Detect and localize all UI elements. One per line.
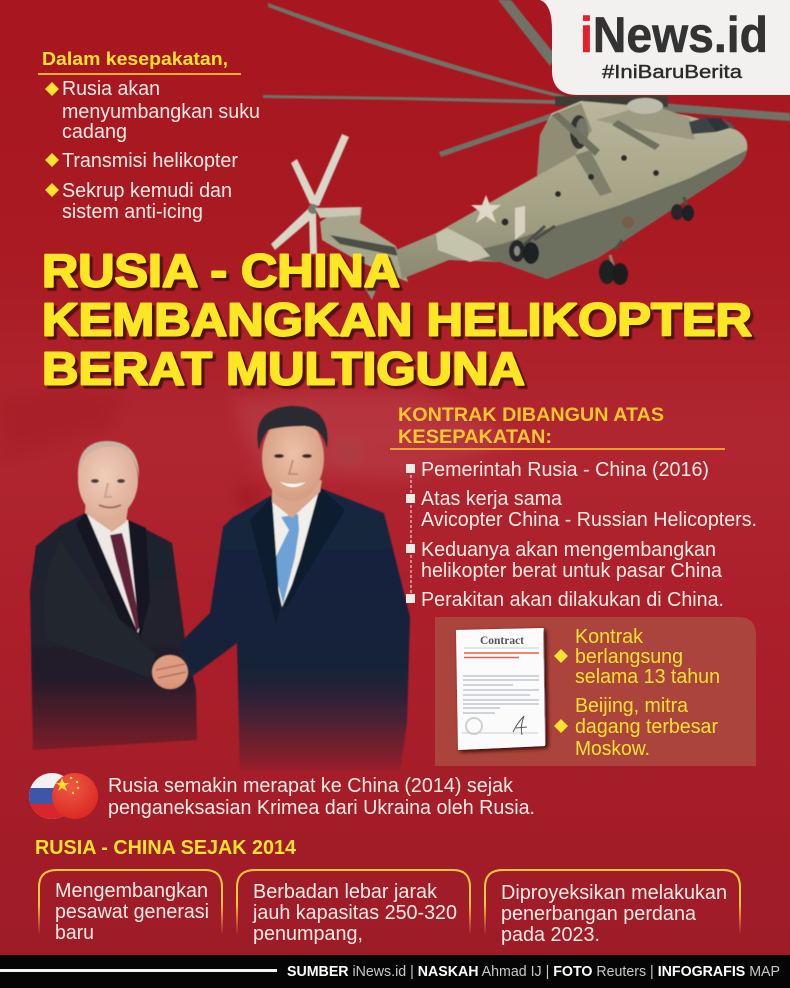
term: assembly: Perakitan akan dilakukan di China. xyxy=(421,588,724,611)
exhaust xyxy=(627,98,663,114)
card: wide body capacity: jauh kapasitas 250-320 xyxy=(252,901,457,924)
card: first flight xyxy=(485,870,740,946)
tail rotor xyxy=(271,134,349,254)
leader left: body xyxy=(30,513,197,750)
contract heading: KESEPAKATAN: xyxy=(398,426,552,448)
fuselage xyxy=(396,101,747,279)
logo tagline: #IniBaruBerita xyxy=(602,62,743,82)
icon: contract document: Contract xyxy=(480,635,524,647)
contract heading xyxy=(390,404,725,449)
title: KEMBANGKAN HELIKOPTER xyxy=(45,296,755,348)
title: RUSIA - CHINA xyxy=(45,248,403,300)
heading: since 2014: RUSIA - CHINA SEJAK 2014 xyxy=(35,837,297,859)
bullet: transmission: Transmisi helikopter xyxy=(62,149,238,172)
leader right: neck xyxy=(272,480,322,518)
leader left: sleeve xyxy=(66,646,154,678)
card: wide body capacity xyxy=(237,870,470,945)
point: trade partner: Moskow. xyxy=(575,737,650,760)
term: development xyxy=(406,538,723,582)
card: wide body capacity: Berbadan lebar jarak xyxy=(253,880,438,903)
bullet: spare parts: menyumbangkan suku xyxy=(62,100,260,123)
title: BERAT MULTIGUNA xyxy=(45,346,528,398)
leader right: head xyxy=(261,425,324,500)
term: cooperation: Atas kerja sama xyxy=(421,487,563,510)
leader left: shirt xyxy=(86,514,140,634)
lower fuselage shade xyxy=(470,150,747,279)
leader left: tie xyxy=(110,533,140,632)
tail fin xyxy=(320,207,408,282)
icon: russia and china flags xyxy=(28,773,98,820)
helicopter illustration xyxy=(263,0,790,300)
bullet: steering screw: sistem anti-icing xyxy=(62,200,203,223)
term: cooperation xyxy=(406,487,757,531)
bullet: spare parts: Rusia akan xyxy=(62,77,160,100)
icon: contract document xyxy=(456,628,546,750)
tail cone fairing xyxy=(436,228,490,262)
term: governments: Pemerintah Rusia - China (2016) xyxy=(421,458,709,481)
point: contract length xyxy=(554,625,720,688)
agreement list, top left xyxy=(38,49,260,223)
bullet: steering screw xyxy=(45,179,232,223)
footer credits bar: SUMBER iNews.id | NASKAH Ahmad IJ | FOTO Reuters | INFOGRAFIS MAP xyxy=(287,964,780,980)
leader right: shirt xyxy=(272,490,320,607)
card: first flight: Diproyeksikan melakukan xyxy=(501,881,727,904)
point: contract length: selama 13 tahun xyxy=(575,665,720,688)
title: KEMBANGKAN HELIKOPTER xyxy=(42,294,752,346)
leader right: lapels xyxy=(250,497,280,625)
text block: Krimea note: Rusia semakin merapat ke China (2014) sejak xyxy=(108,774,514,797)
text block: Krimea note xyxy=(108,774,535,819)
card: new generation aircraft: baru xyxy=(55,921,94,944)
term: development: helikopter berat untuk pasar China xyxy=(421,559,723,582)
card: first flight: pada 2023. xyxy=(501,923,600,946)
footer credits bar xyxy=(0,955,790,988)
text block: Krimea note: penganeksasian Krimea dari Ukraina oleh Rusia. xyxy=(108,796,535,819)
point: trade partner xyxy=(554,694,718,760)
bullet: spare parts xyxy=(45,77,260,143)
red star emblem xyxy=(622,216,634,228)
point: trade partner: dagang terbesar xyxy=(575,715,718,738)
cockpit windows xyxy=(689,117,716,134)
card: new generation aircraft: Mengembangkan xyxy=(55,879,208,902)
bullet: steering screw: Sekrup kemudi dan xyxy=(62,179,232,202)
term: development: Keduanya akan mengembangkan xyxy=(421,538,716,561)
leader right: body xyxy=(178,488,410,770)
contract heading: KONTRAK DIBANGUN ATAS xyxy=(398,404,664,426)
title xyxy=(42,244,755,398)
star xyxy=(471,195,501,223)
title: RUSIA - CHINA xyxy=(42,244,400,296)
term: cooperation: Avicopter China - Russian Helicopters. xyxy=(421,508,757,531)
point: contract length: Kontrak xyxy=(575,625,644,648)
point: trade partner: Beijing, mitra xyxy=(575,694,689,717)
logo wordmark: iNews.id xyxy=(580,7,768,63)
title: BERAT MULTIGUNA xyxy=(42,342,525,394)
leader left: lapels xyxy=(76,512,137,632)
point: contract length: berlangsung xyxy=(575,645,683,668)
leader left: head xyxy=(77,446,139,510)
photo: two leaders shaking hands xyxy=(30,406,410,770)
rotor blades xyxy=(263,0,790,157)
contract terms list xyxy=(390,404,757,611)
logo box xyxy=(540,0,790,95)
portholes xyxy=(502,155,659,226)
agreement heading: Dalam kesepakatan, xyxy=(42,49,228,69)
card: new generation aircraft xyxy=(39,870,222,944)
card: new generation aircraft: pesawat generasi xyxy=(55,900,209,923)
card: first flight: penerbangan perdana xyxy=(501,902,697,925)
faint background aircraft ghost xyxy=(0,391,520,504)
engine housing xyxy=(537,103,592,176)
handshake xyxy=(152,655,188,689)
bullet: spare parts: cadang xyxy=(62,120,127,143)
card: wide body capacity: penumpang, xyxy=(253,922,363,945)
door xyxy=(515,206,525,240)
engine intake xyxy=(570,115,588,149)
leader left: neck xyxy=(84,504,128,532)
leader right: tie xyxy=(273,514,299,604)
landing gear xyxy=(509,197,694,285)
panel: contract details xyxy=(435,617,756,766)
